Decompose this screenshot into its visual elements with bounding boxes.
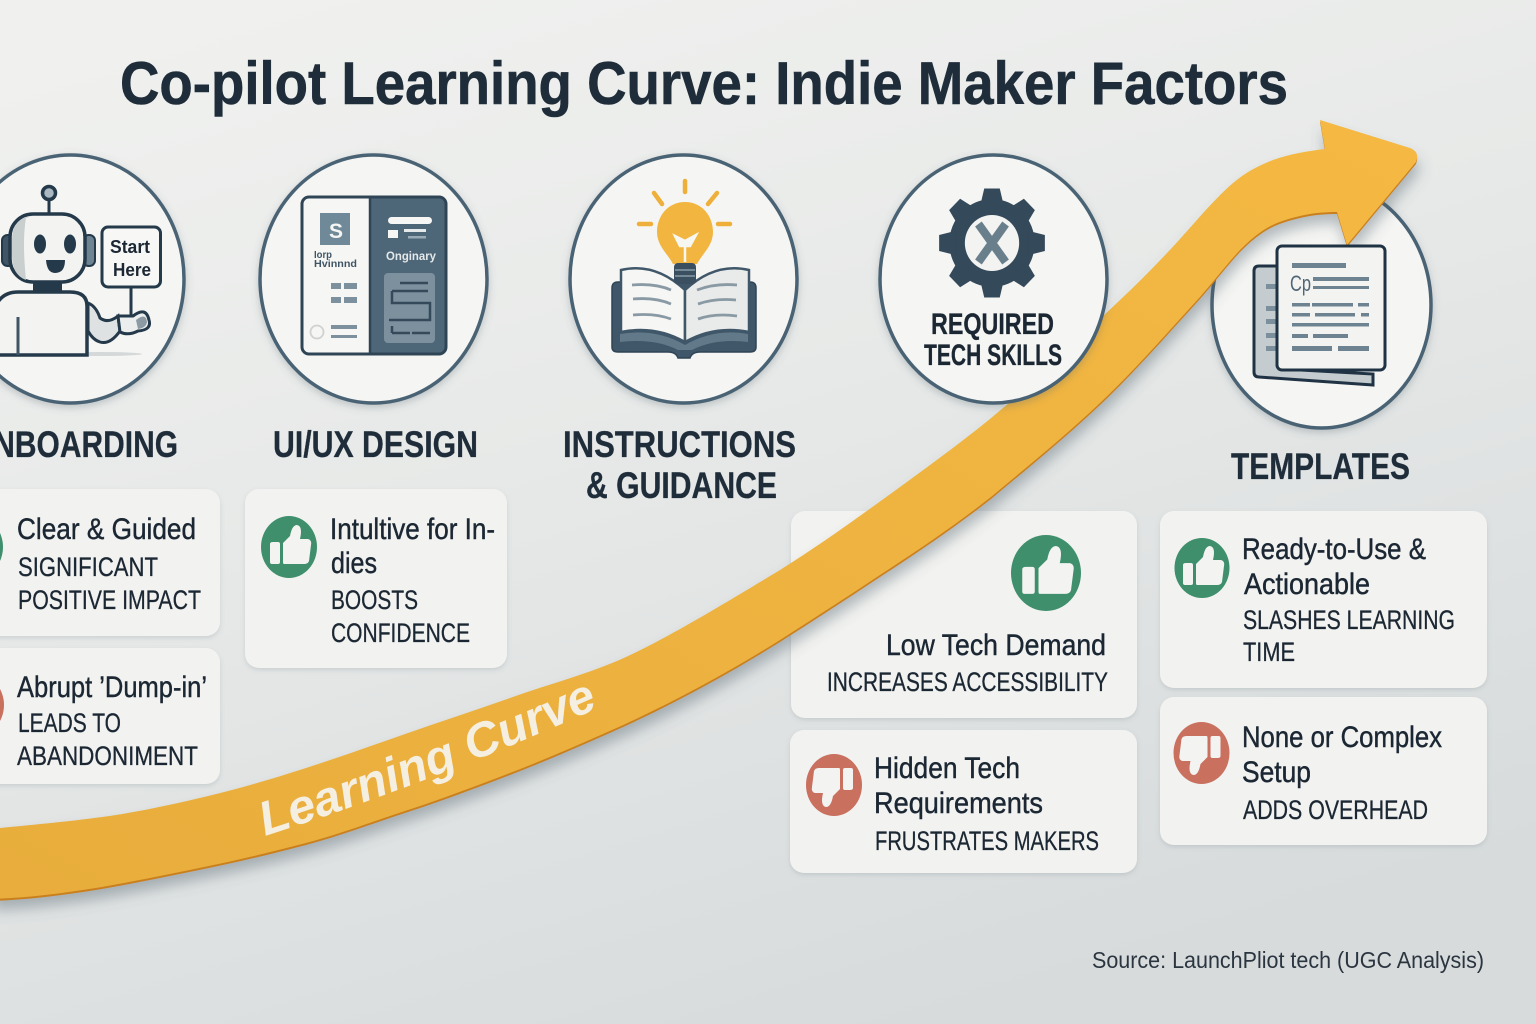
card: intuitive for indies: dies	[331, 547, 377, 580]
card: abrupt dump-in: LEADS TO	[18, 708, 121, 738]
icon circle: ui layout: Hvinnnd	[314, 259, 357, 270]
card: hidden tech requirements	[790, 730, 1137, 873]
icon: document stack: Cp	[1290, 271, 1311, 296]
icon: document stack	[1254, 246, 1385, 385]
heading: required tech skills: TECH SKILLS	[924, 339, 1062, 372]
heading: instructions and guidance	[563, 424, 796, 506]
card: ready-to-use: Ready-to-Use &	[1242, 533, 1426, 566]
sign: start here: Here	[113, 260, 151, 280]
panel: instructions and guidance column	[563, 155, 797, 506]
arrow: learning curve	[0, 120, 1425, 916]
card: abrupt dump-in: Abrupt ’Dump-in’	[17, 671, 207, 704]
card: ready-to-use: SLASHES LEARNING	[1243, 605, 1455, 635]
card: intuitive for indies: CONFIDENCE	[331, 618, 470, 648]
icon circle: onboarding robot	[0, 155, 184, 403]
heading: required tech skills	[924, 308, 1062, 372]
card: intuitive for indies	[245, 489, 507, 668]
title: Co-pilot Learning Curve: Indie Maker Factors	[120, 50, 1288, 117]
icon: gear with x	[939, 188, 1045, 298]
card: abrupt dump-in	[0, 648, 220, 784]
card: clear and guided	[0, 489, 220, 636]
icon circle: ui layout	[260, 155, 487, 403]
card: none or complex setup: ADDS OVERHEAD	[1243, 795, 1428, 825]
panel: required tech skills badge	[880, 155, 1107, 403]
card: clear and guided: POSITIVE IMPACT	[18, 585, 201, 615]
heading: ui/ux design: UI/UX DESIGN	[273, 424, 478, 465]
icon circle: ui layout: Iorp	[314, 250, 332, 261]
card: none or complex setup: Setup	[1242, 756, 1311, 789]
panel: onboarding column	[0, 155, 220, 784]
heading: instructions and guidance: & GUIDANCE	[586, 465, 777, 506]
card: abrupt dump-in: ABANDONIMENT	[17, 741, 198, 771]
card: clear and guided: SIGNIFICANT	[18, 552, 158, 582]
heading: instructions and guidance: INSTRUCTIONS	[563, 424, 796, 465]
card: ready-to-use	[1160, 511, 1487, 688]
card: low tech demand: INCREASES ACCESSIBILITY	[827, 667, 1108, 697]
card: intuitive for indies: BOOSTS	[331, 585, 418, 615]
panel: templates circle	[1212, 182, 1431, 428]
icon circle: ui layout: S	[329, 220, 343, 243]
card: hidden tech requirements: Hidden Tech	[874, 752, 1020, 785]
card: ready-to-use: TIME	[1243, 637, 1295, 667]
sign: start here: Start	[110, 237, 150, 257]
card: none or complex setup	[1160, 697, 1487, 845]
icon circle: book and lightbulb	[570, 155, 797, 403]
heading: required tech skills: REQUIRED	[931, 308, 1054, 341]
label: learning curve: Learning Curve	[262, 687, 594, 836]
card: low tech demand: Low Tech Demand	[886, 629, 1106, 662]
card: none or complex setup: None or Complex	[1242, 721, 1442, 754]
heading: templates: TEMPLATES	[1231, 446, 1410, 487]
sign: start here	[102, 227, 160, 287]
card: ready-to-use: Actionable	[1244, 568, 1370, 601]
icon circle: ui layout: Onginary	[386, 249, 436, 263]
card: intuitive for indies: Intultive for In-	[330, 513, 495, 546]
source note: Source: LaunchPliot tech (UGC Analysis)	[1092, 947, 1484, 973]
panel: ui/ux design column	[245, 155, 507, 668]
card: hidden tech requirements: FRUSTRATES MAKERS	[875, 826, 1099, 856]
panel: templates column	[1160, 246, 1487, 845]
card: clear and guided: Clear & Guided	[17, 513, 196, 546]
card: hidden tech requirements: Requirements	[874, 787, 1043, 820]
card: low tech demand	[791, 511, 1137, 718]
